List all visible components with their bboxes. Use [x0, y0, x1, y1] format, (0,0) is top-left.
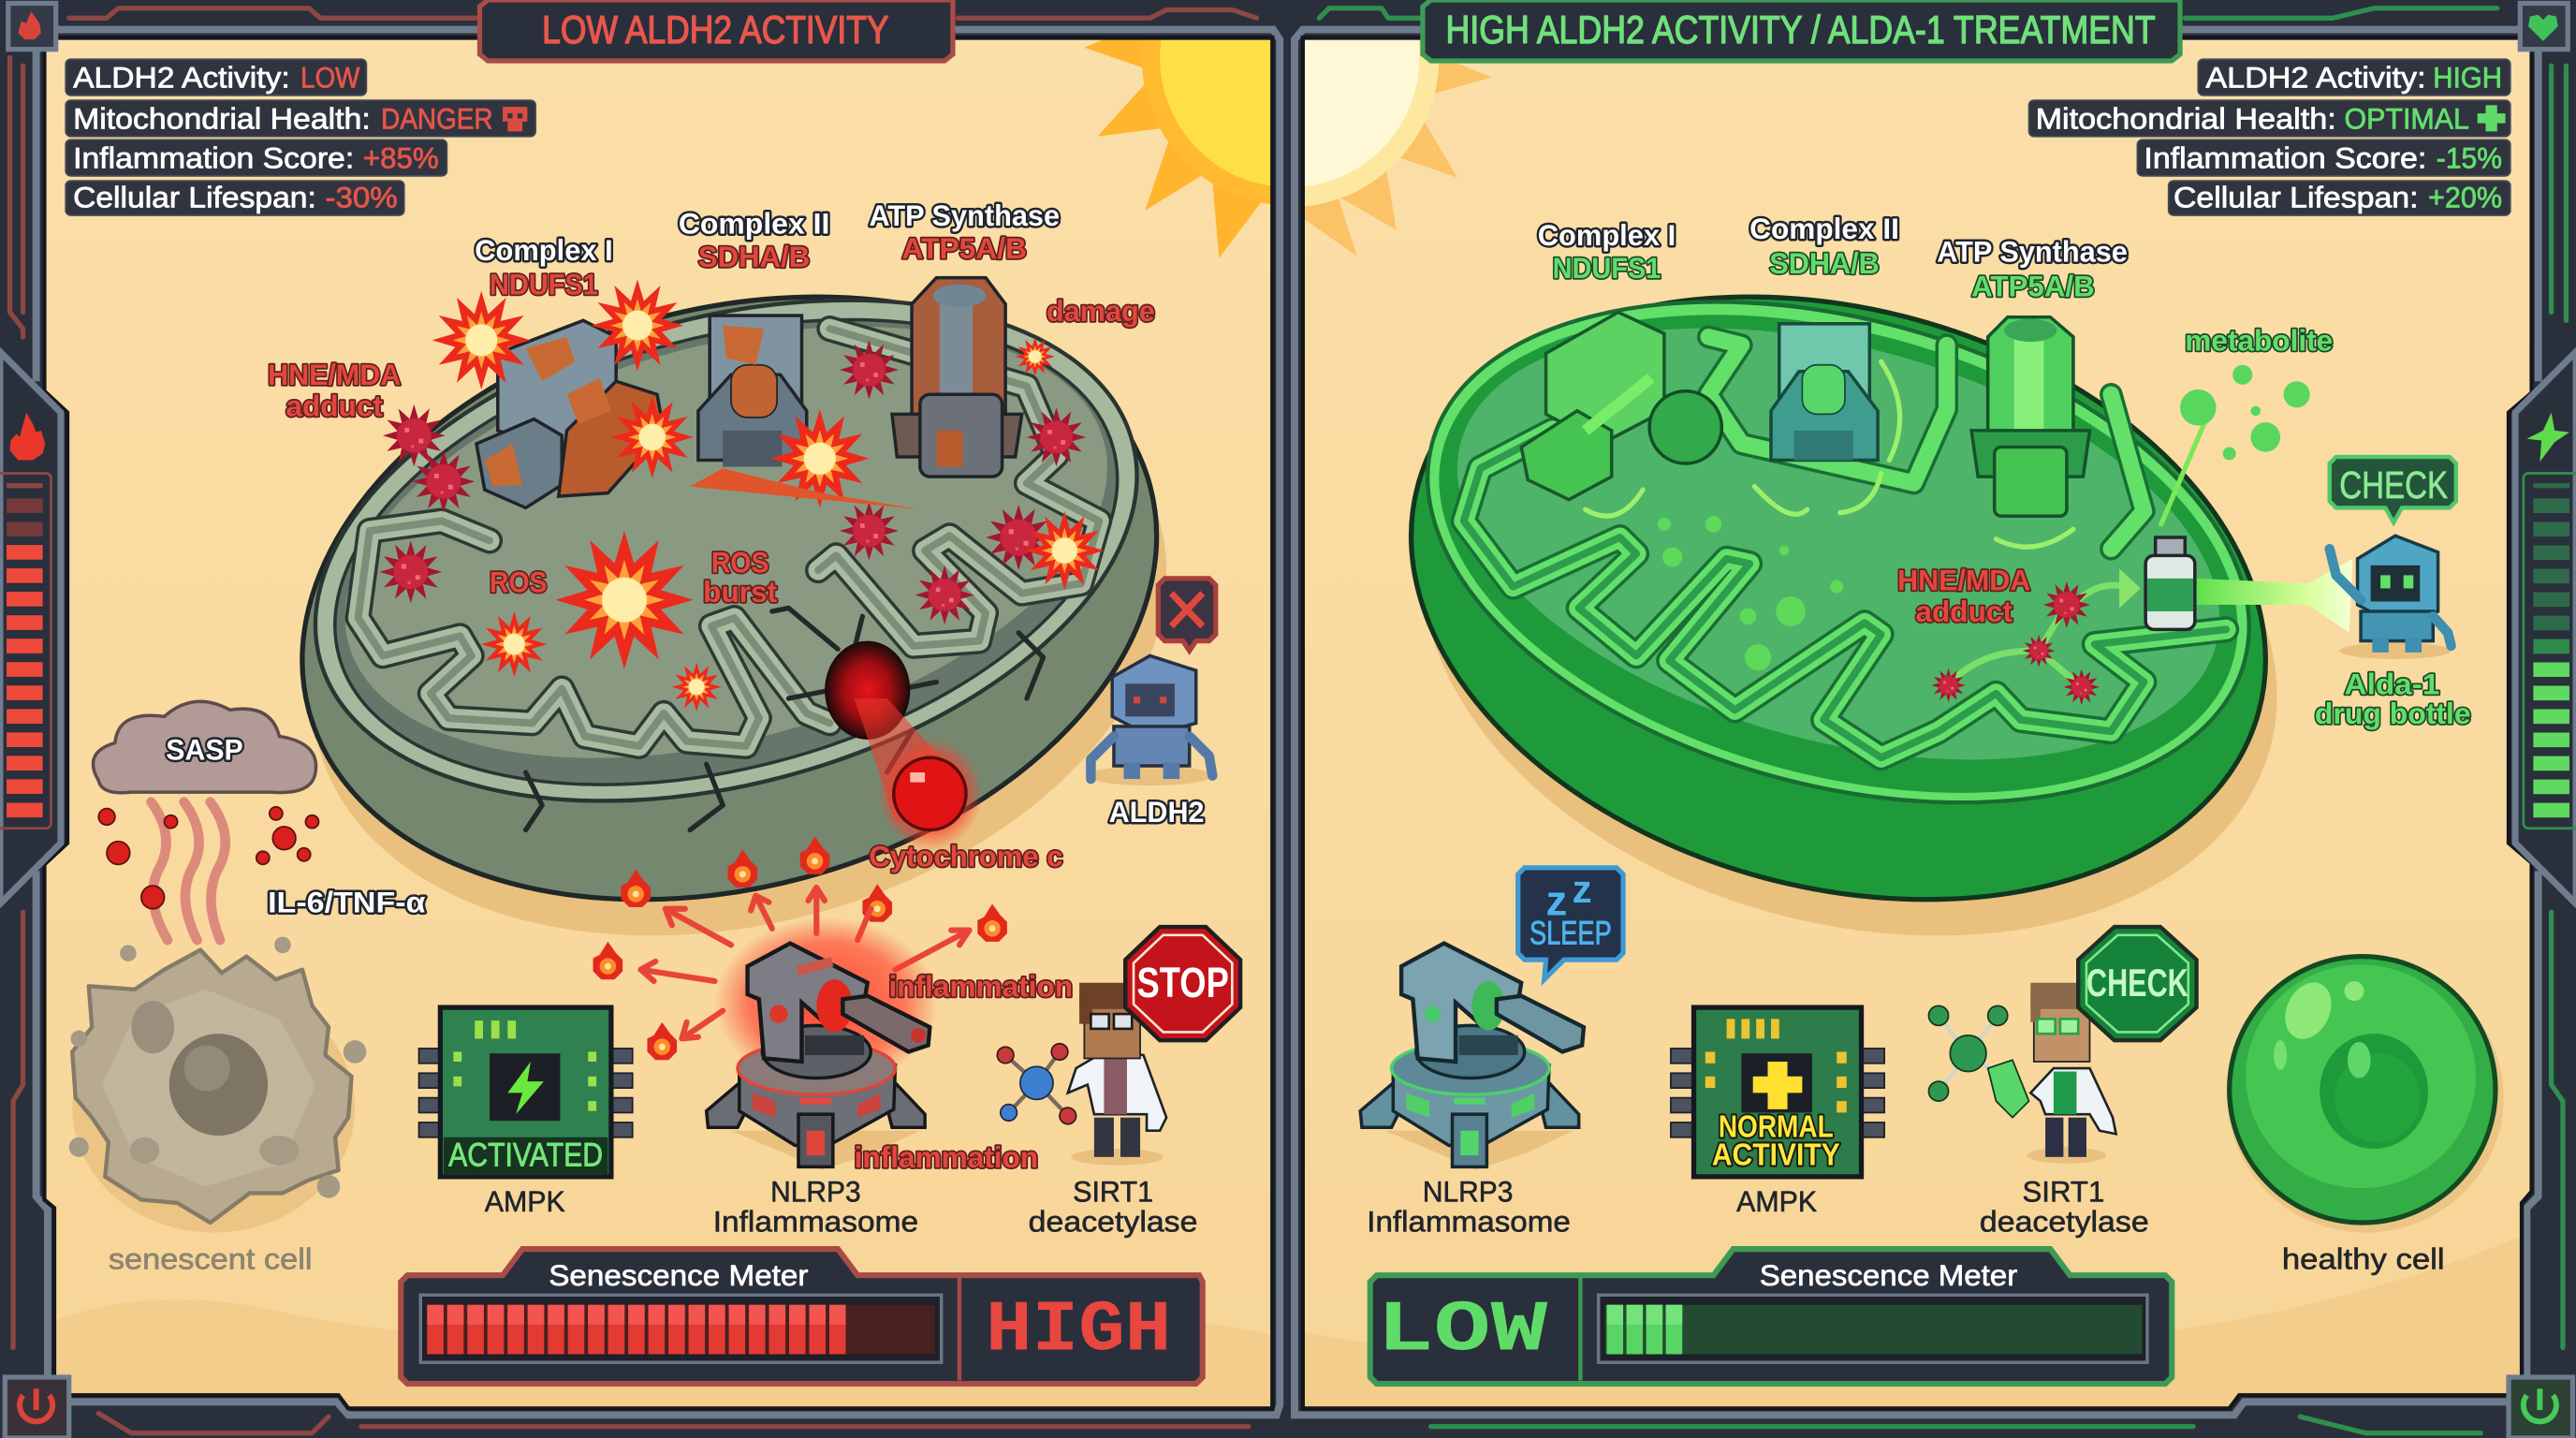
label: healthy cell: healthy cell: [2282, 1242, 2445, 1276]
stats: right: ALDH2 Activity:: [2205, 61, 2426, 95]
right mitochondrion labels: metabolite: [2185, 323, 2333, 357]
stats: left: -30%: [326, 181, 398, 214]
senescence meter: low: [1370, 1249, 2172, 1384]
stats: left: ALDH2 Activity:: [73, 61, 290, 95]
label: NLRP3 left: NLRP3: [770, 1175, 861, 1209]
title: high ALDH2: HIGH ALDH2 ACTIVITY / ALDA-1 TREATMENT: [1445, 7, 2156, 51]
gauge segments: [2524, 474, 2576, 829]
healthy cell: [2228, 957, 2504, 1233]
inflammation labels: inflammation: [855, 1140, 1038, 1174]
molecule: left: [997, 1044, 1076, 1124]
SASP cloud: SASP: [166, 732, 243, 766]
stats: left: Cellular Lifespan:: [73, 181, 316, 214]
left mitochondrion labels: NDUFS1: [490, 268, 598, 301]
left mitochondrion labels: ATP Synthase: [869, 198, 1060, 232]
complex II: rusted: [698, 315, 807, 467]
small green vesicles: [1658, 516, 1843, 670]
left mitochondrion labels: SDHA/B: [698, 240, 810, 273]
label: Alda-1 drug bottle: Alda-1: [2345, 667, 2439, 700]
right mitochondrion labels: Complex I: [1538, 218, 1676, 252]
right mitochondrion labels: Complex II: [1749, 212, 1899, 245]
senescence meter: high: HIGH: [986, 1290, 1171, 1372]
left mitochondrion labels: Cytochrome c: [869, 840, 1063, 873]
left mitochondrion labels: damage: [1046, 294, 1155, 328]
complex II: healthy: [1771, 324, 1878, 461]
icon: skull: [503, 107, 527, 131]
stats: right: +20%: [2428, 181, 2502, 214]
complex I: rusted: [476, 320, 664, 507]
scientist: left: [1068, 983, 1166, 1166]
inflammation labels: inflammation: [889, 969, 1073, 1003]
title: low ALDH2: [479, 0, 953, 61]
left mitochondrion labels: ROS: [490, 565, 547, 598]
label: ALDH2: ALDH2: [1109, 795, 1204, 829]
check sign: CHECK: [2086, 961, 2188, 1005]
mitochondrion: damaged: [234, 206, 1235, 1026]
label: IL-6/TNF-α: IL-6/TNF-α: [268, 886, 426, 919]
side widget: left gauge: [0, 352, 61, 903]
title: high ALDH2: [1423, 0, 2180, 61]
left mitochondrion labels: HNE/MDA: [268, 358, 401, 391]
metabolite particles: [2160, 365, 2310, 526]
cytochrome c ball: [855, 698, 983, 850]
label: SIRT1 left: [1029, 1175, 1197, 1238]
explosions: [432, 279, 1104, 712]
right mitochondrion labels: HNE/MDA: [1897, 564, 2030, 597]
senescent cell: [69, 937, 366, 1233]
right mitochondrion labels: [1538, 212, 2333, 628]
stats: right: -15%: [2437, 141, 2502, 175]
cytokine fireballs and arrows: [593, 837, 1007, 1060]
label: NLRP3 left: [713, 1175, 918, 1238]
stats: left: [66, 59, 535, 215]
senescence meter: high: Senescence Meter: [549, 1258, 809, 1292]
frame: circuit traces, red: [10, 8, 1257, 1433]
cracks: [526, 609, 1043, 829]
label: AMPK right: AMPK: [1736, 1184, 1817, 1218]
stats: left: LOW: [300, 61, 360, 95]
sun, left half: [1084, 39, 1271, 258]
gauge segments: [0, 474, 51, 829]
stats: right: Mitochondrial Health:: [2036, 101, 2336, 135]
label: NLRP3 right: [1367, 1175, 1571, 1238]
inflammation labels: [855, 969, 1073, 1174]
label: AMPK left: AMPK: [485, 1184, 565, 1218]
sleep bubble: z: [1546, 876, 1567, 924]
corner icon: flame: [8, 4, 56, 50]
sleep bubble: [1518, 867, 1623, 979]
ATP synthase: healthy: [1971, 317, 2089, 516]
rust debris: [690, 468, 920, 509]
stats: right: Cellular Lifespan:: [2174, 181, 2419, 214]
molecule: right: [1928, 1005, 2029, 1118]
right mitochondrion labels: ATP5A/B: [1971, 269, 2095, 302]
label: SIRT1 right: SIRT1: [2023, 1175, 2104, 1209]
NLRP3 turret: active: [707, 917, 938, 1170]
robot: Alda-1: [2330, 536, 2452, 659]
left mitochondrion labels: ROS: [711, 545, 768, 579]
label: SIRT1 right: [1980, 1175, 2149, 1238]
sand dune: [44, 1299, 1273, 1410]
sun, right half: [1305, 39, 1492, 257]
cristae: [359, 329, 1099, 746]
stats: right: [2029, 59, 2510, 215]
label: SIRT1 right: deacetylase: [1980, 1204, 2149, 1238]
SASP cloud: [93, 701, 316, 793]
label: Alda-1 drug bottle: drug bottle: [2315, 697, 2471, 730]
label: NLRP3 right: Inflammasome: [1367, 1204, 1571, 1238]
adduct conversion pathway: [1931, 568, 2141, 705]
senescence meter: low: Senescence Meter: [1760, 1258, 2017, 1292]
side widget: right gauge: [2515, 352, 2576, 903]
complex I: healthy: [1521, 313, 1721, 500]
stats: left: Inflammation Score:: [73, 141, 354, 175]
label: SIRT1 left: deacetylase: [1029, 1204, 1197, 1238]
panel: low ALDH2: [47, 39, 1271, 1406]
icon: bolt: [2526, 413, 2569, 462]
check bubble: [2330, 457, 2456, 522]
right mitochondrion labels: SDHA/B: [1769, 246, 1880, 280]
scientist: right: [2027, 983, 2116, 1164]
AMPK chip: activated: [419, 1007, 633, 1177]
stats: left: Mitochondrial Health:: [73, 101, 371, 135]
corner icon: power, left: [5, 1377, 69, 1438]
ROS particles: [379, 340, 1086, 624]
cytokine dots: [98, 807, 318, 909]
AMPK chip: activated: ACTIVATED: [448, 1137, 603, 1174]
left mitochondrion labels: ATP5A/B: [902, 231, 1027, 265]
stats: right: HIGH: [2433, 61, 2502, 95]
senescence meter: low: LOW: [1377, 1290, 1548, 1372]
corner icon: power, right: [2509, 1377, 2572, 1438]
green glow arcs: [1586, 361, 2073, 547]
right mitochondrion labels: NDUFS1: [1553, 251, 1661, 285]
stats: left: +85%: [363, 141, 439, 175]
AMPK chip: normal: NORMAL: [1719, 1110, 1834, 1145]
AMPK chip: normal: ACTIVITY: [1712, 1138, 1840, 1173]
right mitochondrion labels: adduct: [1915, 594, 2012, 628]
label: senescent cell: senescent cell: [109, 1242, 312, 1276]
icon: flame: [10, 413, 45, 461]
sleep bubble: z: [1573, 867, 1592, 911]
left mitochondrion labels: adduct: [285, 389, 383, 423]
NLRP3 turret: sleeping: [1360, 944, 1584, 1170]
hull breach: [825, 641, 910, 740]
left mitochondrion labels: Complex II: [679, 207, 829, 241]
panel: high ALDH2: [1305, 39, 2529, 1406]
icon: plus: [2478, 105, 2506, 131]
stats: left: DANGER: [381, 101, 493, 135]
sand dune: [1303, 1233, 2530, 1410]
stop sign: [1125, 927, 1240, 1040]
green beam: [2197, 559, 2352, 633]
wavy secretion lines: [151, 802, 226, 940]
ATP synthase: rusted: [892, 278, 1022, 477]
left mitochondrion labels: burst: [703, 575, 778, 609]
title: low ALDH2: LOW ALDH2 ACTIVITY: [542, 7, 889, 51]
Alda-1 drug bottle: [2145, 537, 2195, 629]
check sign: [2078, 927, 2197, 1040]
frame: circuit traces, green: [1319, 8, 2566, 1433]
right mitochondrion labels: ATP Synthase: [1937, 235, 2128, 269]
mitochondrion: healthy: [1343, 206, 2345, 1026]
stats: right: Inflammation Score:: [2144, 141, 2426, 175]
label: SIRT1 left: SIRT1: [1073, 1175, 1153, 1209]
senescence meter: high: [401, 1249, 1203, 1384]
check bubble: CHECK: [2339, 463, 2448, 506]
label: NLRP3 left: Inflammasome: [713, 1204, 918, 1238]
stop sign: STOP: [1137, 959, 1229, 1006]
X bubble: [1158, 579, 1216, 651]
left mitochondrion labels: Complex I: [475, 233, 613, 267]
sleep bubble: SLEEP: [1530, 916, 1612, 952]
label: Alda-1 drug bottle: [2315, 667, 2471, 730]
robot: ALDH2 inactive: [1088, 655, 1212, 785]
corner icon: heart: [2520, 4, 2568, 50]
AMPK chip: normal: [1671, 1007, 1884, 1177]
label: NLRP3 right: NLRP3: [1423, 1175, 1513, 1209]
stats: right: OPTIMAL: [2345, 101, 2469, 135]
cristae: [1464, 337, 2226, 757]
left mitochondrion labels: [268, 198, 1155, 873]
